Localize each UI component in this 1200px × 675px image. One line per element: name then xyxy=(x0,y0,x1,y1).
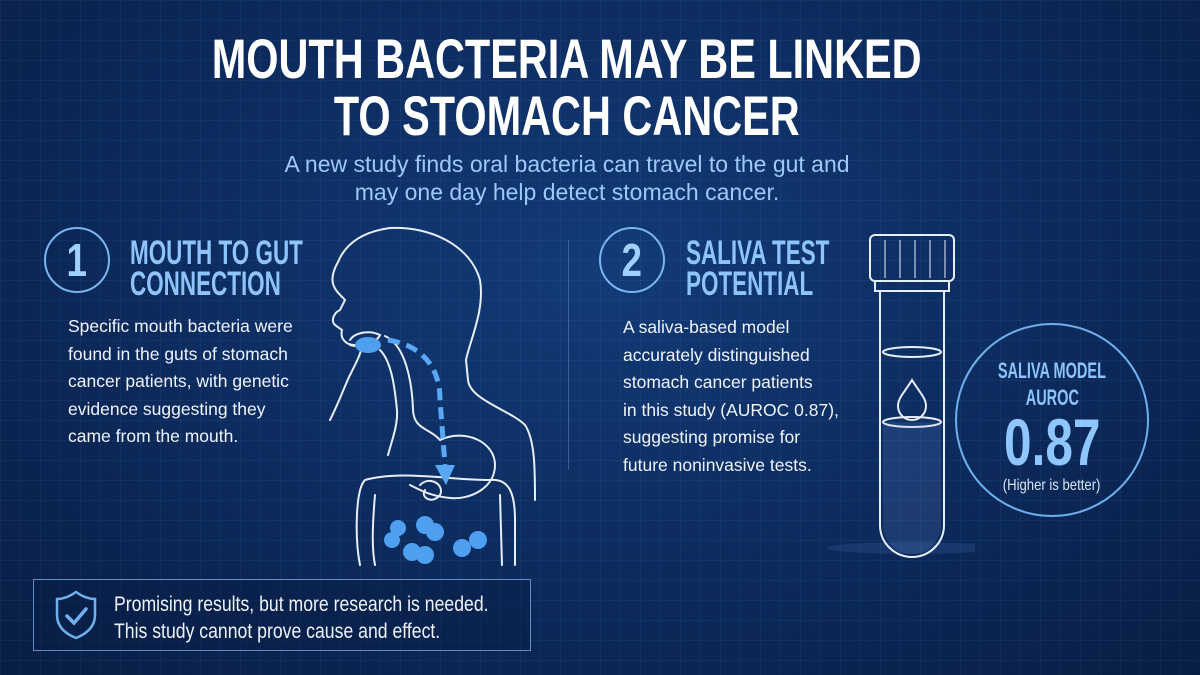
subtitle xyxy=(284,151,850,205)
title: MOUTH BACTERIA MAY BE LINKED xyxy=(212,27,922,90)
divider xyxy=(568,240,569,470)
body text 1: evidence suggesting they xyxy=(68,398,266,418)
body text 2: stomach cancer patients xyxy=(623,372,813,392)
subtitle: A new study finds oral bacteria can travel to the gut and xyxy=(284,151,850,177)
body text 2: A saliva-based model xyxy=(623,317,789,337)
number badge 2 xyxy=(599,227,665,293)
body text 1: found in the guts of stomach xyxy=(68,344,288,364)
title: TO STOMACH CANCER xyxy=(334,84,800,147)
heading 1: MOUTH TO GUT xyxy=(130,234,303,272)
icon: shield check xyxy=(56,590,96,640)
heading 2: SALIVA TEST xyxy=(686,234,829,272)
caveat text: This study cannot prove cause and effect. xyxy=(114,620,440,643)
bacteria mouth xyxy=(355,337,381,353)
subtitle: may one day help detect stomach cancer. xyxy=(355,179,779,205)
number badge 1 xyxy=(44,227,110,293)
arrow: mouth to gut xyxy=(388,340,455,485)
callout: AUROC badge: AUROC xyxy=(1025,385,1079,410)
number badge 2: 2 xyxy=(622,234,642,286)
callout: caveat box xyxy=(33,579,531,651)
caveat text: Promising results, but more research is needed. xyxy=(114,593,489,616)
heading 2: POTENTIAL xyxy=(686,265,813,303)
callout: AUROC badge: SALIVA MODEL xyxy=(998,358,1106,383)
heading 1 xyxy=(130,234,303,303)
body text 2: in this study (AUROC 0.87), xyxy=(623,400,839,420)
illustration: body with digestive tract xyxy=(329,226,536,566)
body text 1: came from the mouth. xyxy=(68,426,238,446)
callout: AUROC badge xyxy=(955,323,1149,517)
body text 1: Specific mouth bacteria were xyxy=(68,316,293,336)
heading 1: CONNECTION xyxy=(130,265,281,303)
body text 2: future noninvasive tests. xyxy=(623,454,812,474)
callout: AUROC badge: (Higher is better) xyxy=(1003,477,1101,494)
body text 1 xyxy=(68,316,293,446)
panel: mouth to gut xyxy=(44,226,536,566)
number badge 1: 1 xyxy=(67,234,87,286)
body text 2: suggesting promise for xyxy=(623,427,800,447)
body text 2 xyxy=(623,317,839,474)
title xyxy=(212,27,922,147)
panel: saliva test xyxy=(599,227,1149,558)
callout: AUROC badge: 0.87 xyxy=(1004,405,1100,479)
body text 1: cancer patients, with genetic xyxy=(68,371,289,391)
caveat text xyxy=(114,593,489,643)
heading 2 xyxy=(686,234,830,303)
icon: test tube xyxy=(827,234,975,558)
body text 2: accurately distinguished xyxy=(623,344,810,364)
